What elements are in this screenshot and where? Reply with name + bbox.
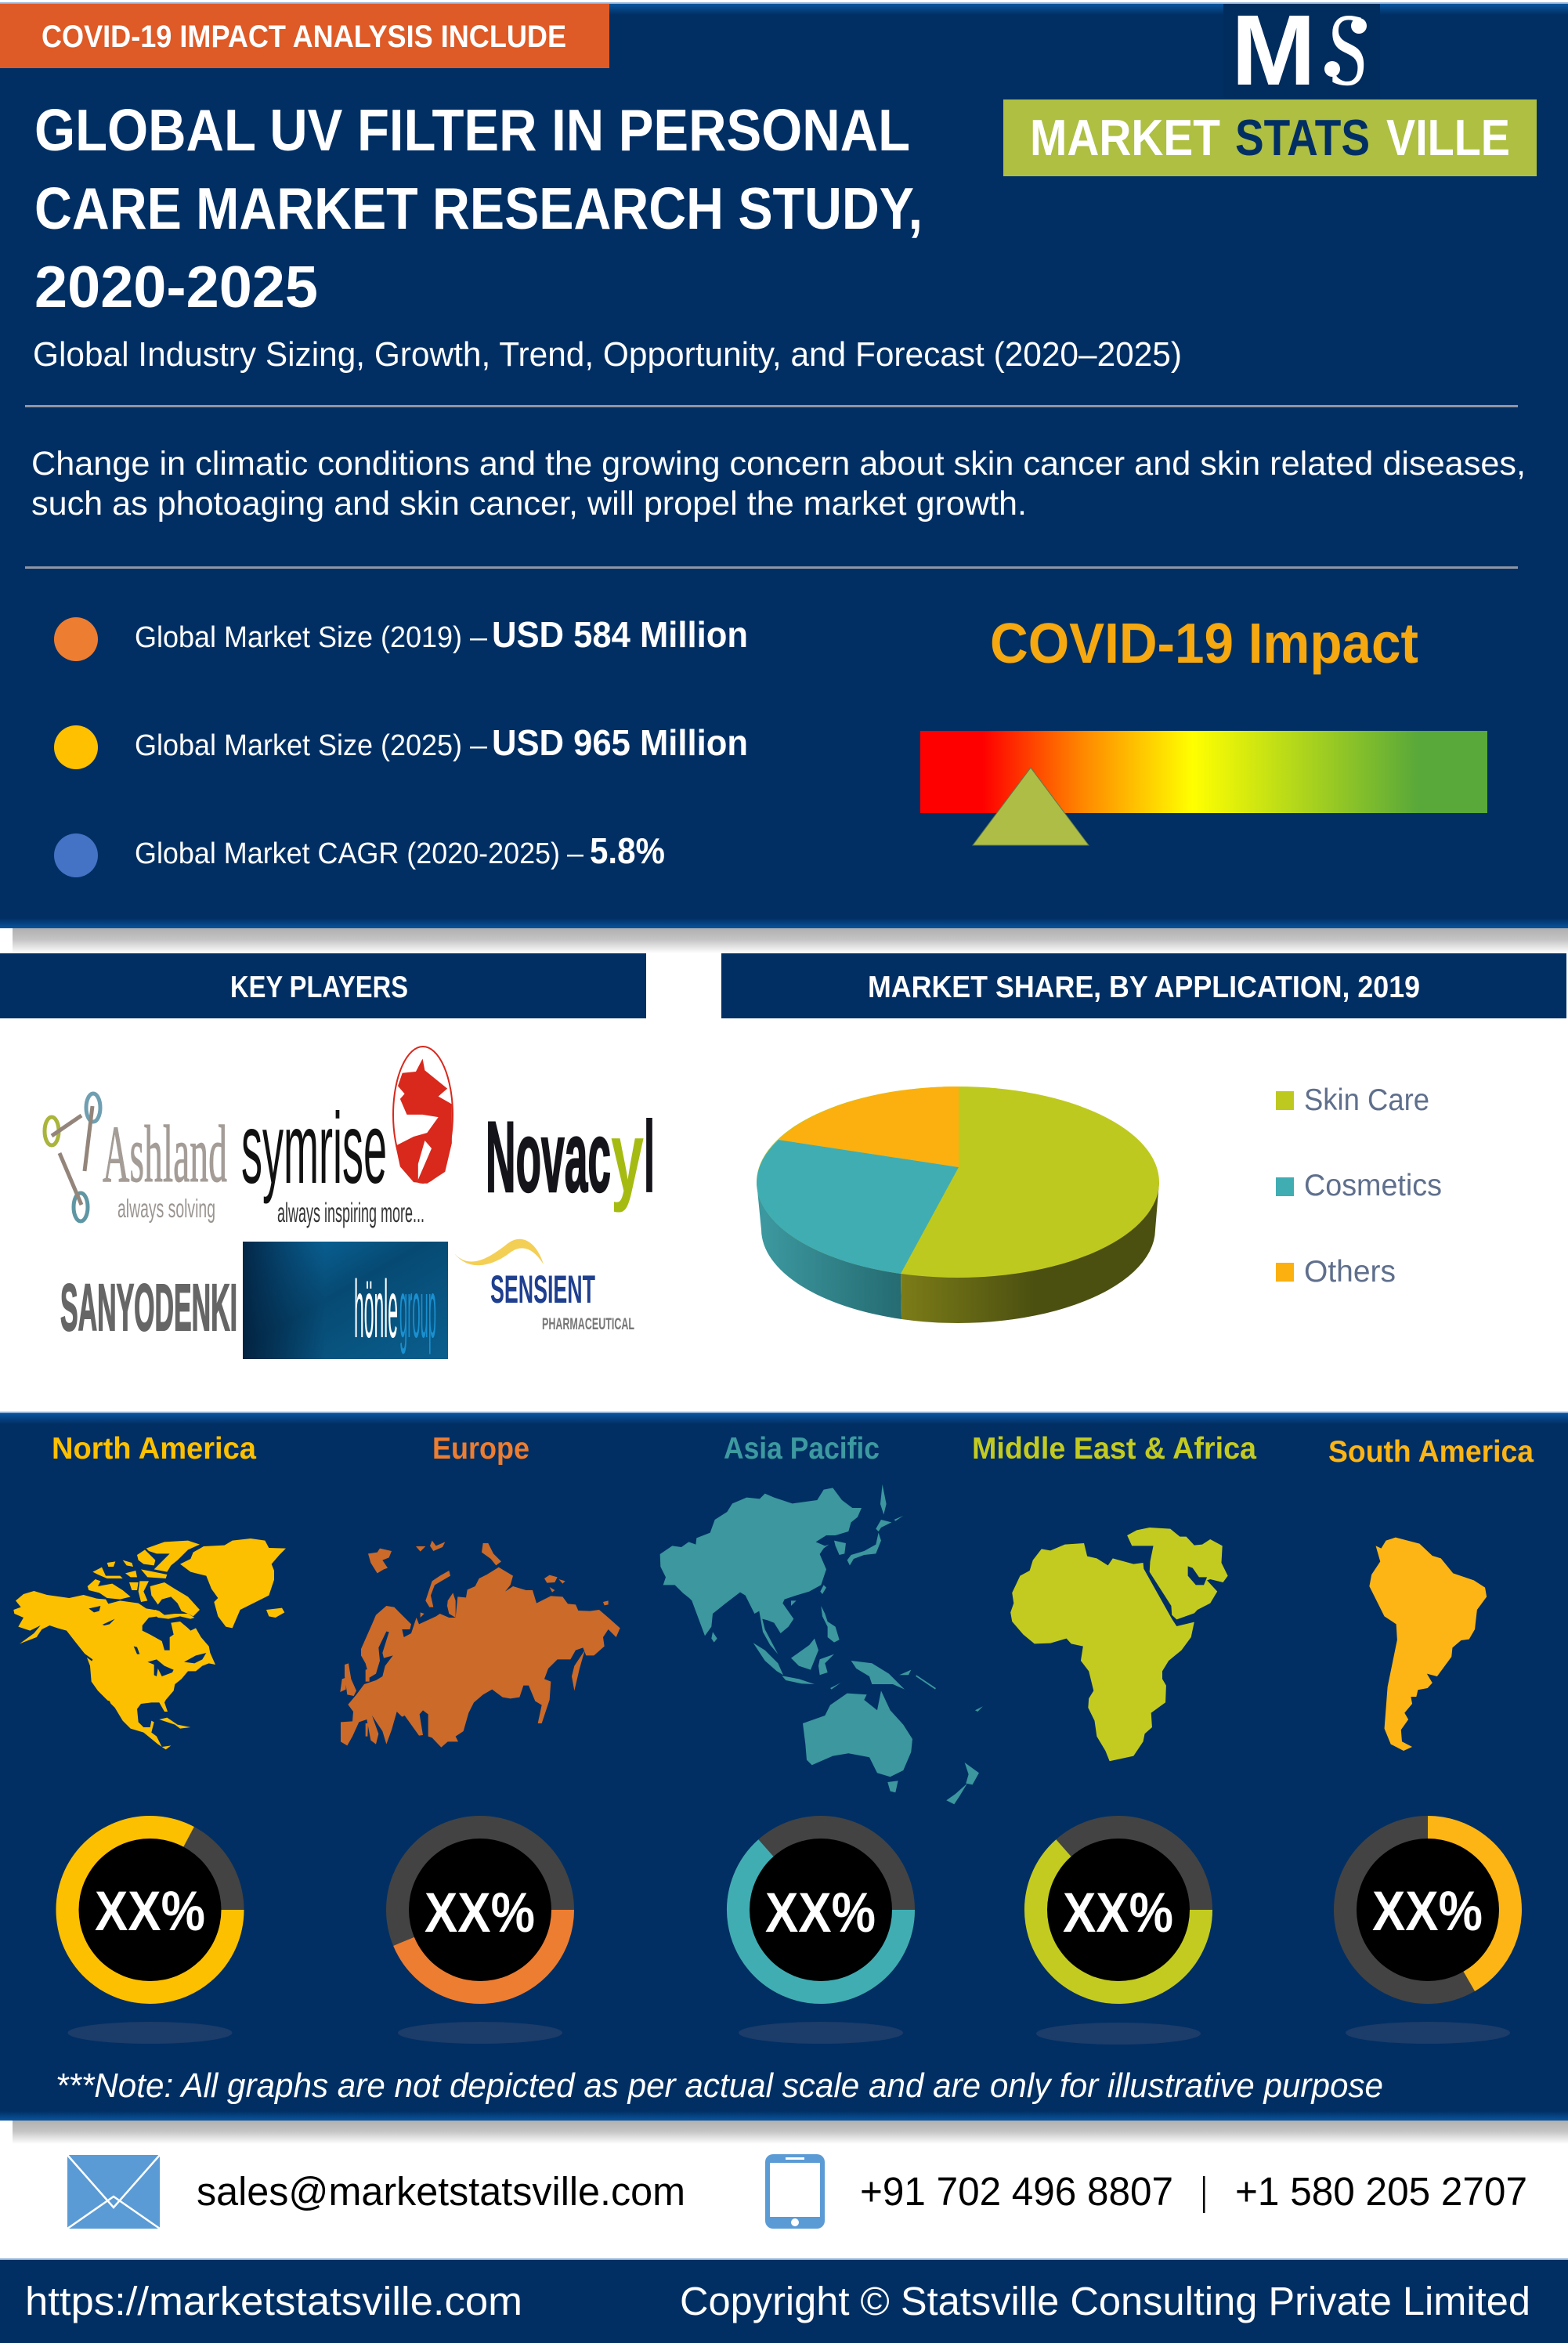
logo: sensient (454, 1239, 634, 1333)
pie slice: skin care (757, 1087, 1159, 1278)
logo: ashland: always solving (117, 1194, 215, 1223)
contact: email (67, 2155, 685, 2229)
stat: market size 2019: USD 584 Million (492, 614, 748, 655)
stat: market size 2025: Global Market Size (2025) (135, 729, 462, 762)
chart legend: Skin Care (1304, 1083, 1429, 1117)
infographic canvas: l (644, 1101, 655, 1213)
panel: key player logos: SANYODENKI (60, 1271, 237, 1344)
heading: key players (0, 953, 646, 1018)
donut: north america (67, 1828, 232, 2044)
logo: symrise (241, 1047, 453, 1228)
header panel shadow (13, 928, 1568, 953)
panel: footer (0, 2258, 1568, 2343)
region label: south america: South America (1328, 1435, 1534, 1469)
pie chart: market share by application (757, 1087, 1159, 1323)
tag: covid-19 impact analysis: COVID-19 IMPACT ANALYSIS INCLUDE (42, 20, 566, 54)
logo: sensient: PHARMACEUTICAL (542, 1315, 634, 1333)
donut: middle east and africa (1036, 1828, 1201, 2045)
pie slice: others (779, 1087, 959, 1167)
contact: phone: +1 580 205 2707 (1235, 2169, 1527, 2214)
title (34, 97, 923, 320)
title: CARE MARKET RESEARCH STUDY, (34, 175, 923, 241)
heading: key players: KEY PLAYERS (230, 971, 408, 1004)
stat: market size 2019: Global Market Size (2019) (135, 621, 462, 654)
logo: novacyl (486, 1101, 655, 1213)
map: asia pacific (660, 1484, 983, 1804)
copyright: Copyright © Statsville Consulting Private Limited (680, 2279, 1530, 2323)
logo: novacyl: Novac (486, 1101, 611, 1213)
heading: market share (721, 953, 1566, 1018)
donut: europe: XX% (425, 1882, 535, 1944)
note text: ***Note: All graphs are not depicted as per actual scale and are only for illustrative purpose (56, 2066, 1383, 2105)
gauge pointer (973, 768, 1089, 845)
contact: email: sales@marketstatsville.com (197, 2169, 685, 2214)
donut: asia pacific: XX% (765, 1882, 876, 1944)
donut: south america: XX% (1372, 1881, 1483, 1943)
logo: novacyl: y (611, 1101, 644, 1213)
pie slice: cosmetics (757, 1140, 959, 1274)
description text: Change in climatic conditions and the growing concern about skin cancer and skin related diseases, (31, 445, 1526, 483)
logo: market stats ville (1003, 0, 1537, 176)
stat: market cagr: – (567, 837, 584, 870)
logo: honle group (243, 1242, 448, 1359)
panel: key player logos (45, 1047, 655, 1359)
regions panel shadow (13, 2121, 1568, 2144)
donut: middle east and africa: XX% (1063, 1882, 1173, 1944)
map: south america (1369, 1538, 1487, 1751)
panel: key player logos: hönle (354, 1264, 398, 1355)
region label: north america: North America (52, 1432, 256, 1466)
subtitle: Global Industry Sizing, Growth, Trend, Opportunity, and Forecast (2020–2025) (33, 335, 1182, 374)
stat: market cagr: 5.8% (590, 830, 665, 871)
stat: market size 2019: – (470, 621, 488, 654)
description text: such as photoaging and skin cancer, will propel the market growth. (31, 485, 1027, 522)
panel: regions (0, 1412, 1568, 2121)
panel: key player logos: Ashland (103, 1109, 227, 1199)
region label: asia pacific: Asia Pacific (724, 1432, 880, 1466)
icon: envelope (67, 2155, 160, 2229)
stat: market size 2025: – (470, 729, 488, 762)
donut: south america (1346, 1828, 1510, 2044)
stat: market cagr: Global Market CAGR (2020-2025) (135, 837, 560, 870)
pie side: cosmetics (757, 1182, 901, 1319)
stat: market size 2025 (54, 722, 748, 769)
region label: middle east and africa: Middle East & Africa (972, 1432, 1256, 1466)
pie side: skin care (901, 1182, 1159, 1323)
website link: https://marketstatsville.com (25, 2279, 522, 2323)
stat: market size 2025: USD 965 Million (492, 722, 748, 763)
title: 2020-2025 (34, 254, 318, 320)
region label: europe: Europe (432, 1432, 529, 1466)
logo: sensient: SENSIENT (490, 1267, 595, 1311)
donut: europe (398, 1828, 562, 2044)
impact gauge (920, 731, 1487, 845)
donut: north america: XX% (95, 1881, 205, 1943)
panel: key player logos: group (399, 1264, 436, 1355)
heading: market share: MARKET SHARE, BY APPLICATION, 2019 (868, 971, 1420, 1004)
logo: symrise: symrise (241, 1093, 387, 1205)
chart legend (1276, 1083, 1442, 1289)
logo: market stats ville: VILLE (1386, 109, 1510, 166)
icon: smartphone (765, 2154, 825, 2229)
covid-19 impact heading: COVID-19 Impact (990, 613, 1418, 675)
chart legend: Others (1304, 1255, 1396, 1289)
map: north america (13, 1538, 286, 1749)
description text (31, 445, 1526, 522)
contact: phone: +91 702 496 8807 (860, 2169, 1173, 2214)
logo: market stats ville: MARKET (1030, 109, 1220, 166)
map: europe (340, 1541, 620, 1748)
chart legend: Cosmetics (1304, 1169, 1442, 1202)
map: middle east and africa (1010, 1528, 1228, 1761)
logo: ashland (45, 1094, 227, 1223)
contact: phone (765, 2154, 1527, 2229)
logo: market stats ville: STATS (1235, 109, 1370, 166)
title: GLOBAL UV FILTER IN PERSONAL (34, 97, 910, 163)
stat: market cagr (54, 830, 665, 877)
stat: market size 2019 (54, 614, 748, 661)
donut: asia pacific (739, 1828, 903, 2044)
tag: covid-19 impact analysis (0, 4, 609, 68)
logo: symrise: always inspiring more... (277, 1198, 425, 1228)
panel: header (0, 0, 1568, 928)
